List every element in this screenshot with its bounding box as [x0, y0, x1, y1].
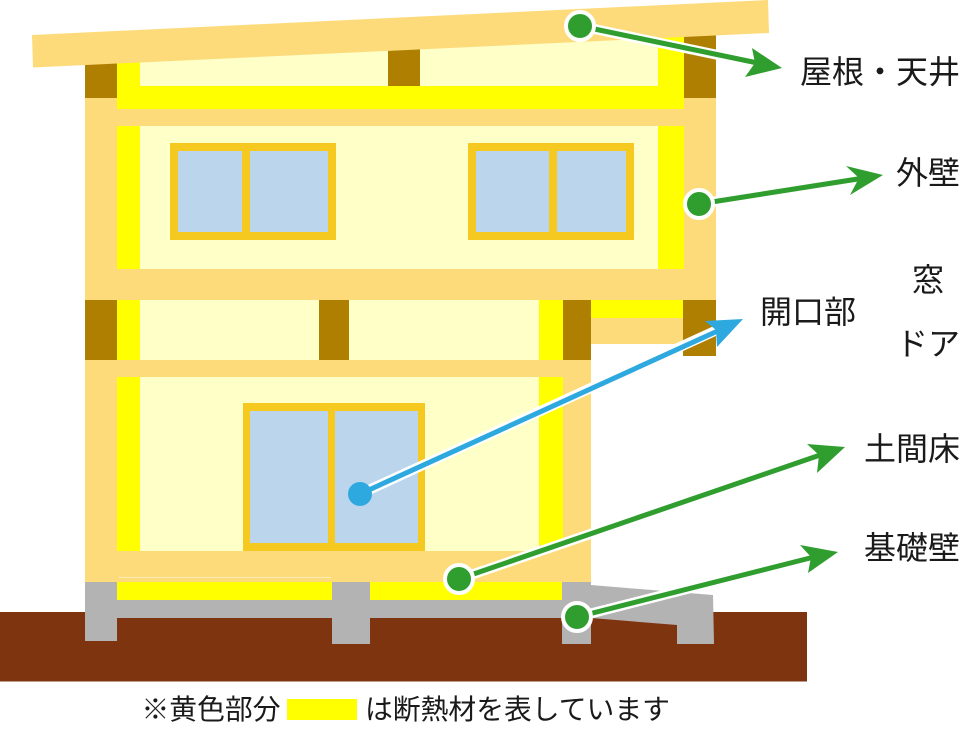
first floor walls — [85, 360, 591, 582]
window: upper right — [468, 143, 634, 240]
window: upper left — [170, 143, 336, 240]
attic beams — [85, 30, 716, 98]
mid-storey beams — [85, 300, 716, 360]
arrow: earth floor — [445, 444, 845, 593]
label: window: 窓 — [912, 262, 944, 298]
label: door: ドア — [896, 326, 960, 362]
ground — [0, 612, 807, 682]
roof — [32, 0, 769, 68]
legend text: insulation: は断熱材を表しています — [365, 694, 670, 725]
insulation: floor — [117, 582, 562, 600]
legend text: yellow part: ※黄色部分 — [142, 694, 281, 725]
arrow: foundation wall — [563, 545, 838, 631]
label: openings: 開口部 — [760, 294, 856, 330]
door window — [243, 403, 425, 551]
mid-storey — [85, 300, 716, 360]
arrow: exterior wall — [685, 166, 883, 218]
label: exterior wall: 外壁 — [896, 155, 960, 191]
label: earth floor: 土間床 — [864, 431, 960, 467]
label: roof and ceiling: 屋根・天井 — [800, 54, 960, 90]
insulation: lower walls — [117, 377, 563, 551]
legend — [142, 694, 670, 725]
foundation — [85, 582, 714, 644]
legend swatch — [287, 699, 357, 720]
label: foundation wall: 基礎壁 — [864, 530, 960, 566]
arrow: roof — [566, 12, 782, 77]
insulation: ceiling — [117, 30, 684, 109]
second floor walls — [85, 98, 716, 300]
arrow: openings — [348, 319, 743, 506]
attic — [85, 30, 716, 109]
insulation: upper walls — [117, 126, 684, 269]
